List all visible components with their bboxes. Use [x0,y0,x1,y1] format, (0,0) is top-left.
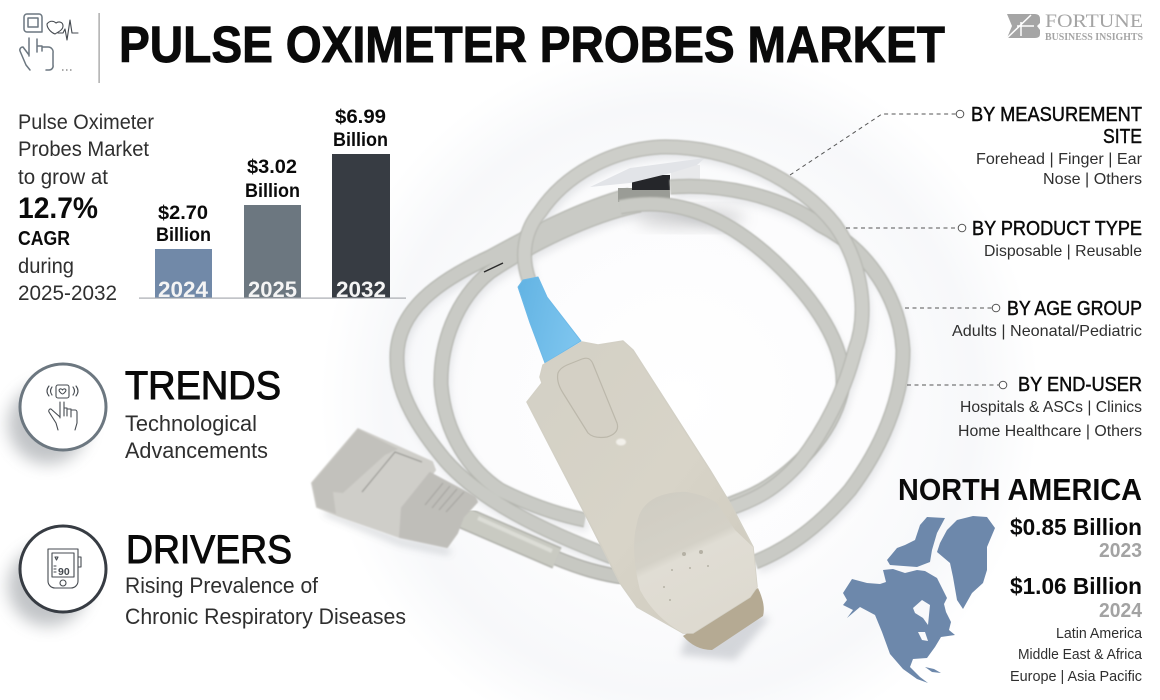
bar: 2032 [332,107,390,302]
callout: by product type: BY PRODUCT TYPE [972,218,1142,240]
stat: 2023 value: 2023 [1099,540,1142,562]
bar: 2024: $2.70 [158,203,208,224]
callout: by measurement site: Forehead | Finger | Ear [976,151,1143,168]
map: north america [843,516,995,683]
text: other regions: Europe | Asia Pacific [1010,668,1142,685]
text: trends description: Technological [125,411,257,436]
bar: 2025: $3.02 [247,157,297,178]
text: other regions: Middle East & Africa [1018,646,1143,663]
plug connector [312,429,477,552]
stat: 2023 value [1010,514,1142,562]
text block: CAGR summary: 2025-2032 [18,282,117,305]
header divider [98,13,100,83]
heading: north america: NORTH AMERICA [898,472,1142,507]
text block: CAGR summary: 12.7% [18,192,98,225]
header icon: finger on oximeter with heartbeat [20,14,78,70]
logo: Fortune Business Insights: BUSINESS INSIGHTS [1045,32,1143,43]
callout: by age group: Adults | Neonatal/Pediatric [952,323,1142,340]
callout: by measurement site: SITE [1103,126,1142,148]
stat: 2024 value: 2024 [1099,600,1143,622]
callout: by end-user: Hospitals & ASCs | Clinics [960,399,1142,416]
text: other regions [1010,625,1143,685]
callout: by measurement site [790,104,1143,188]
callout: by age group: BY AGE GROUP [1007,298,1142,320]
regional panel: north america [843,472,1143,685]
text block: CAGR summary: to grow at [18,166,108,189]
text: drivers description [125,573,406,629]
heading: drivers: DRIVERS [126,528,292,572]
text: other regions: Latin America [1056,625,1143,642]
bar: 2025: 2025 [248,277,297,302]
stat: 2024 value [1010,573,1143,622]
callout: by product type [846,218,1142,260]
left cable loops [397,195,640,557]
bar: 2025: Billion [245,181,300,202]
stat: 2024 value: $1.06 Billion [1010,573,1142,599]
blue strain relief [518,277,581,363]
bar: 2025 [244,157,301,302]
bar: 2032: 2032 [336,277,386,302]
callout: by product type: Disposable | Reusable [984,243,1142,260]
text block: CAGR summary: Pulse Oximeter [18,111,154,134]
text: drivers description: Chronic Respiratory Diseases [125,604,406,629]
drivers panel [8,526,406,629]
callout: by end-user: Home Healthcare | Others [958,423,1142,440]
text: drivers description: Rising Prevalence of [125,573,319,598]
text: trends description: Advancements [125,438,268,463]
logo: Fortune Business Insights: FORTUNE [1045,11,1143,32]
bar: 2032: $6.99 [335,107,386,128]
callout: by age group [905,298,1142,340]
text block: CAGR summary [18,111,154,305]
trends panel [8,364,281,464]
callout: by measurement site: Nose | Others [1043,171,1142,188]
icon: drivers circle with oximeter [8,526,106,626]
bar chart: market size [139,107,406,302]
callout: by end-user [907,374,1142,440]
bar: 2024: Billion [156,225,211,246]
bar: 2024 [155,203,212,302]
finger clip body [527,341,770,660]
title: PULSE OXIMETER PROBES MARKET [119,16,945,73]
clip dome [634,492,757,633]
text block: CAGR summary: CAGR [18,228,70,250]
callout: by measurement site: BY MEASUREMENT [971,104,1142,126]
tube from plug [462,517,628,578]
text block: CAGR summary: during [18,255,74,278]
text: trends description [125,411,268,463]
callout: by end-user: BY END-USER [1018,374,1142,396]
bar: 2032: Billion [333,130,388,151]
icon: drivers circle with oximeter: 90 [58,566,70,578]
stat: 2023 value: $0.85 Billion [1010,514,1142,540]
clip button [558,358,618,438]
heading: trends: TRENDS [125,364,281,408]
cable shadows [400,153,906,568]
probe photo: cable, connector, finger clip [312,147,906,660]
bar: 2024: 2024 [158,277,209,302]
text block: CAGR summary: Probes Market [18,138,149,161]
sensor head at top of cable [590,158,705,202]
logo: Fortune Business Insights [1006,11,1143,43]
right cable loops [525,147,903,562]
icon: trends circle [8,364,106,464]
